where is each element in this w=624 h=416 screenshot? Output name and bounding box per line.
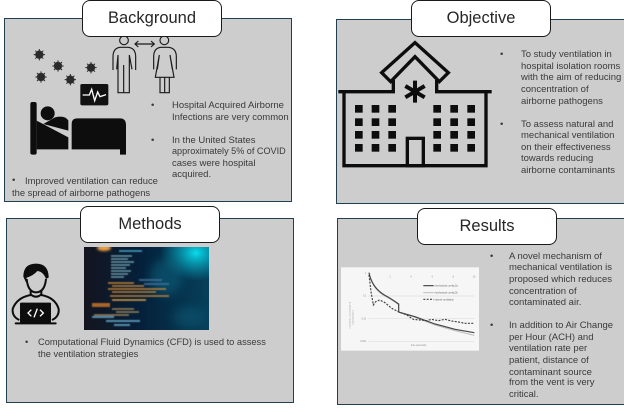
text: objectives: on their effectiveness bbox=[521, 142, 611, 153]
icon: heart monitor bbox=[80, 84, 108, 106]
image: blurred source code on dark screen bbox=[84, 247, 209, 330]
text: hospital acquired infections bbox=[151, 100, 289, 180]
text: objectives: hospital isolation rooms bbox=[521, 61, 620, 72]
heading: methods bbox=[80, 206, 220, 243]
text: objectives: towards reducing bbox=[521, 153, 593, 164]
heading: background: Background bbox=[108, 9, 196, 27]
chart: concentration over time: contaminant (-) bbox=[352, 310, 355, 325]
text: results: In addition to Air Change bbox=[509, 320, 613, 331]
panel: results bbox=[337, 218, 624, 405]
chart: concentration over time bbox=[341, 267, 479, 351]
text: results: • bbox=[490, 251, 493, 262]
text: hospital acquired infections: Infections are very common bbox=[172, 112, 289, 123]
text: objectives: To study ventilation in bbox=[521, 49, 612, 60]
chart: concentration over time: 0.01 bbox=[362, 318, 367, 320]
text: improved ventilation bbox=[12, 175, 158, 198]
icon: viruses bbox=[34, 49, 97, 86]
text: results: per Hour (ACH) and bbox=[509, 332, 593, 343]
chart: concentration over time: time (seconds) bbox=[411, 344, 426, 347]
text: results: mechanical ventilation is bbox=[509, 262, 612, 273]
icon: programmer at laptop bbox=[12, 264, 60, 324]
text: results: • bbox=[490, 320, 493, 331]
text: hospital acquired infections: In the United States bbox=[172, 135, 255, 146]
text: hospital acquired infections: Hospital Acquired Airborne bbox=[172, 100, 284, 111]
text: results: contaminated air. bbox=[509, 297, 581, 308]
text: objectives: airborne contaminants bbox=[521, 165, 615, 176]
panel: objective bbox=[336, 19, 624, 204]
text: hospital acquired infections: approximately 5% of COVID bbox=[172, 146, 286, 156]
chart: concentration over time: 4 bbox=[410, 276, 412, 278]
panel: background bbox=[4, 18, 292, 202]
text: objectives: To assess natural and bbox=[521, 119, 613, 130]
text: results: from the vent is very bbox=[509, 377, 595, 388]
chart: concentration over time: mechanical config 2a bbox=[434, 285, 458, 288]
chart: concentration over time: natural ventilation bbox=[434, 298, 455, 301]
text: objectives: mechanical ventilation bbox=[521, 130, 614, 141]
panel: methods bbox=[6, 218, 294, 403]
chart: concentration over time: normalized concentration of bbox=[348, 301, 351, 328]
text: objectives: with the aim of reducing bbox=[521, 72, 621, 83]
icon: patient in bed bbox=[30, 102, 126, 155]
text: methods: Computational Fluid Dynamics (CFD) is used to assess bbox=[38, 337, 266, 347]
heading: results: Results bbox=[459, 217, 515, 235]
text: improved ventilation: Improved ventilation can reduce bbox=[25, 175, 158, 186]
heading: objective bbox=[411, 0, 551, 37]
icon: man and woman with arrow bbox=[112, 37, 177, 94]
text: results: A novel mechanism of bbox=[509, 251, 602, 262]
text: objectives: concentration of bbox=[521, 84, 589, 95]
text: results bbox=[490, 251, 613, 400]
text: results: concentration of bbox=[509, 286, 577, 297]
chart: concentration over time: 2 bbox=[389, 276, 391, 278]
chart: concentration over time: mechanical config 2b bbox=[434, 292, 458, 295]
icon: hospital bbox=[338, 40, 492, 168]
heading: results bbox=[417, 208, 557, 245]
chart: concentration over time: 1 bbox=[365, 273, 367, 275]
text: improved ventilation: • bbox=[12, 175, 15, 186]
text: objectives bbox=[500, 49, 621, 176]
text: methods: the ventilation strategies bbox=[38, 349, 138, 359]
chart: concentration over time: 0.1 bbox=[363, 296, 367, 298]
text: hospital acquired infections: acquired. bbox=[172, 169, 211, 180]
text: results: ventilation rate per bbox=[509, 343, 587, 354]
text: objectives: airborne pathogens bbox=[521, 96, 603, 107]
text: results: patient, distance of bbox=[509, 355, 589, 366]
heading: background bbox=[82, 0, 222, 37]
heading: objective: Objective bbox=[447, 9, 515, 27]
chart: concentration over time: 0.001 bbox=[360, 341, 367, 343]
text: results: contaminant source bbox=[509, 367, 592, 378]
chart: concentration over time: 10 bbox=[473, 276, 476, 278]
heading: methods: Methods bbox=[118, 215, 182, 233]
text: methods bbox=[25, 337, 266, 359]
text: hospital acquired infections: • bbox=[151, 135, 154, 146]
text: improved ventilation: the spread of airborne pathogens bbox=[12, 187, 150, 198]
text: results: critical. bbox=[509, 389, 539, 400]
text: hospital acquired infections: cases were hospital bbox=[172, 158, 255, 169]
text: objectives: • bbox=[500, 119, 503, 130]
text: results: proposed which reduces bbox=[509, 274, 612, 285]
text: hospital acquired infections: • bbox=[151, 100, 154, 111]
text: methods: • bbox=[25, 337, 28, 347]
chart: concentration over time: 6 bbox=[432, 276, 434, 278]
text: objectives: • bbox=[500, 49, 503, 60]
chart: concentration over time: 8 bbox=[453, 276, 455, 278]
